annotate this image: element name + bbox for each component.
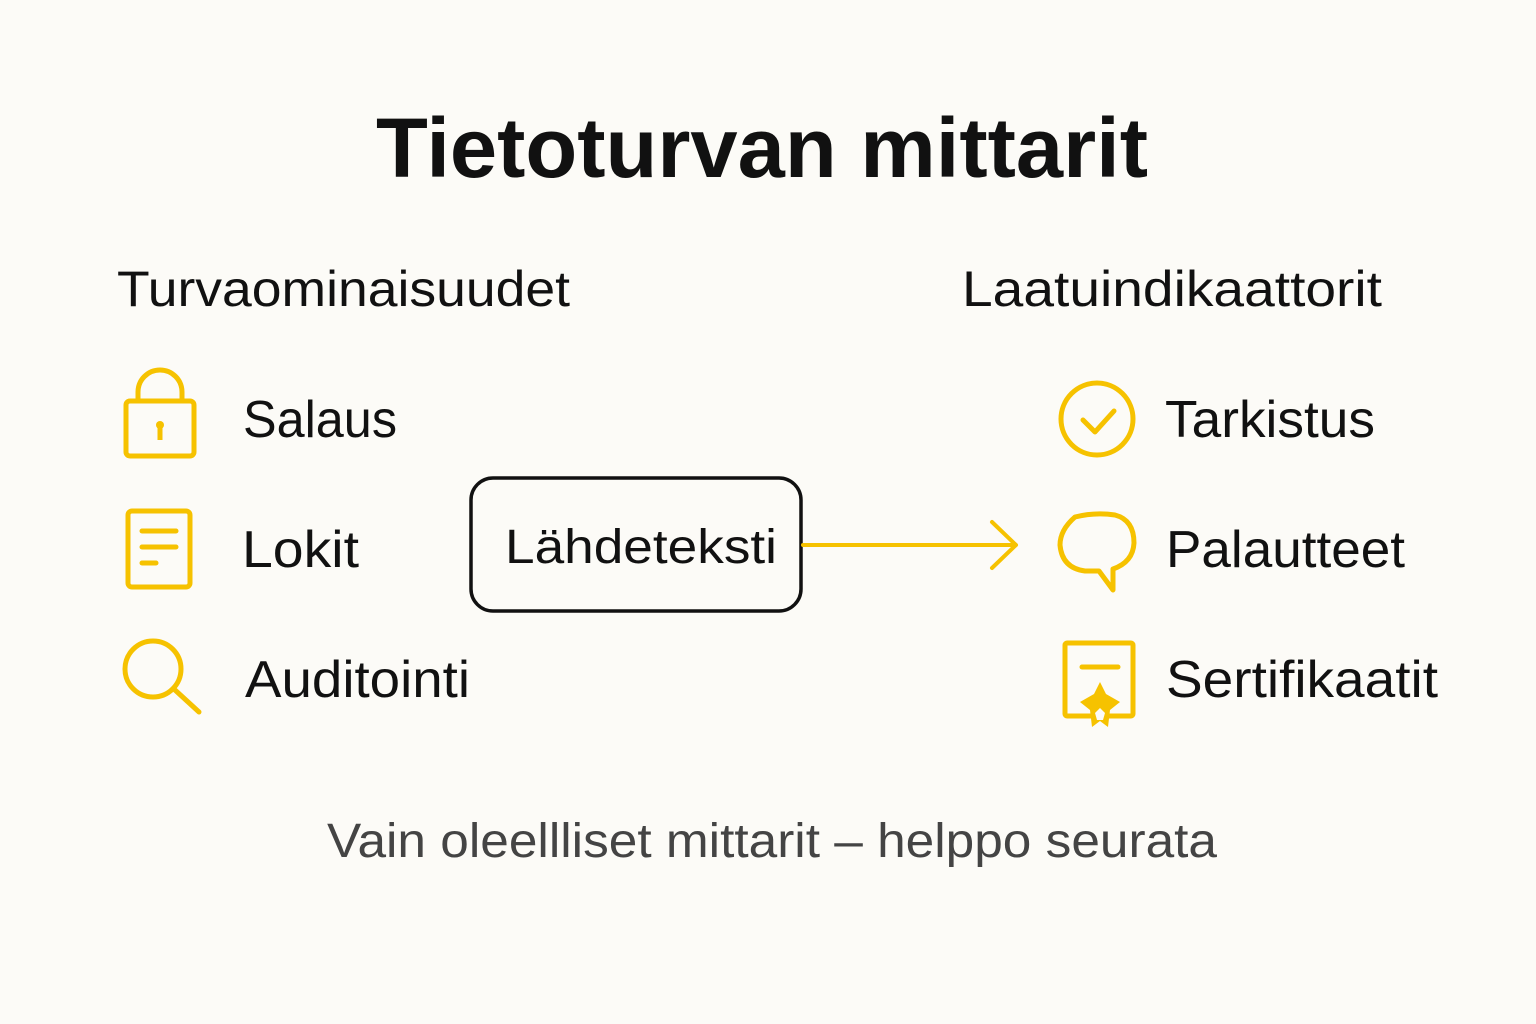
item: Auditointi: Auditointi — [245, 651, 470, 709]
footer tagline: Vain oleellliset mittarit – helppo seurata — [327, 815, 1217, 868]
heading: Laatuindikaattorit: Laatuindikaattorit — [962, 261, 1382, 317]
icon: magnifier — [125, 641, 199, 712]
icon: check circle — [1061, 383, 1133, 455]
item: Tarkistus: Tarkistus — [1165, 391, 1375, 449]
icon: speech bubble — [1060, 514, 1134, 590]
icon: certificate — [1065, 643, 1133, 727]
box: Lähdeteksti: Lähdeteksti — [505, 521, 777, 574]
icon: document — [128, 511, 190, 587]
item: Salaus: Salaus — [243, 391, 397, 449]
item: Sertifikaatit: Sertifikaatit — [1166, 651, 1439, 709]
icon: padlock — [126, 370, 194, 456]
box: Lähdeteksti — [471, 478, 801, 611]
title: Tietoturvan mittarit — [376, 101, 1148, 195]
arrow — [803, 522, 1016, 568]
item: Palautteet: Palautteet — [1166, 521, 1406, 579]
heading: Turvaominaisuudet: Turvaominaisuudet — [117, 261, 570, 317]
item: Lokit: Lokit — [242, 521, 360, 579]
